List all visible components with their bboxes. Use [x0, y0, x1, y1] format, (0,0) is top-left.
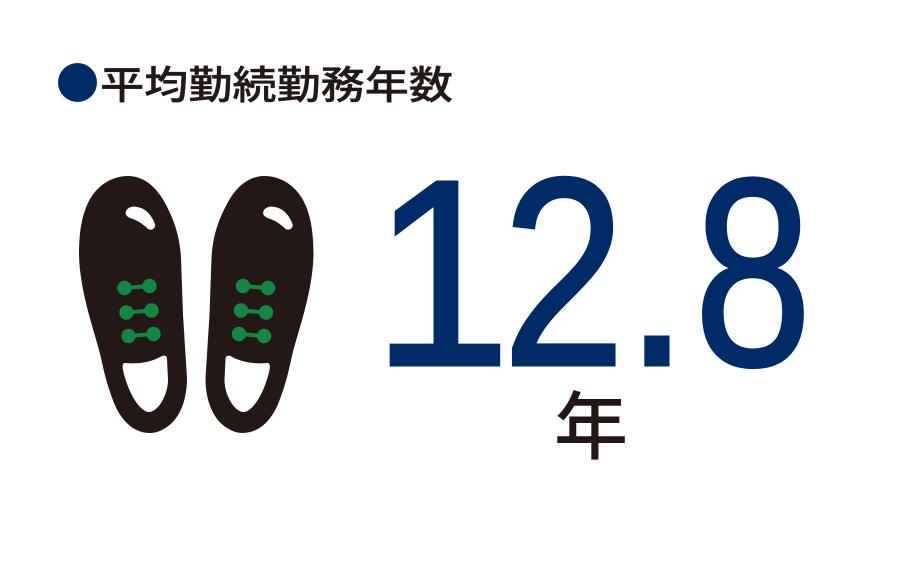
unit: 年	[554, 386, 628, 469]
right shoe laces	[232, 279, 275, 343]
right shoe toe hole	[263, 207, 293, 230]
big number: 2	[502, 123, 625, 423]
title: 平均勤続勤務年数	[100, 65, 453, 108]
big number: .	[624, 128, 690, 421]
heading bullet	[58, 63, 97, 102]
left shoe laces	[118, 279, 160, 343]
left shoe toe hole	[126, 207, 155, 230]
big number: 8	[694, 123, 812, 423]
left shoe heel hole	[123, 356, 168, 412]
icon: left shoe	[79, 176, 187, 433]
right shoe sole	[206, 176, 314, 433]
right shoe heel hole	[224, 356, 270, 412]
big number	[372, 123, 812, 423]
big number: 1	[372, 124, 511, 422]
icon: right shoe	[206, 176, 314, 433]
left shoe sole	[79, 176, 187, 433]
